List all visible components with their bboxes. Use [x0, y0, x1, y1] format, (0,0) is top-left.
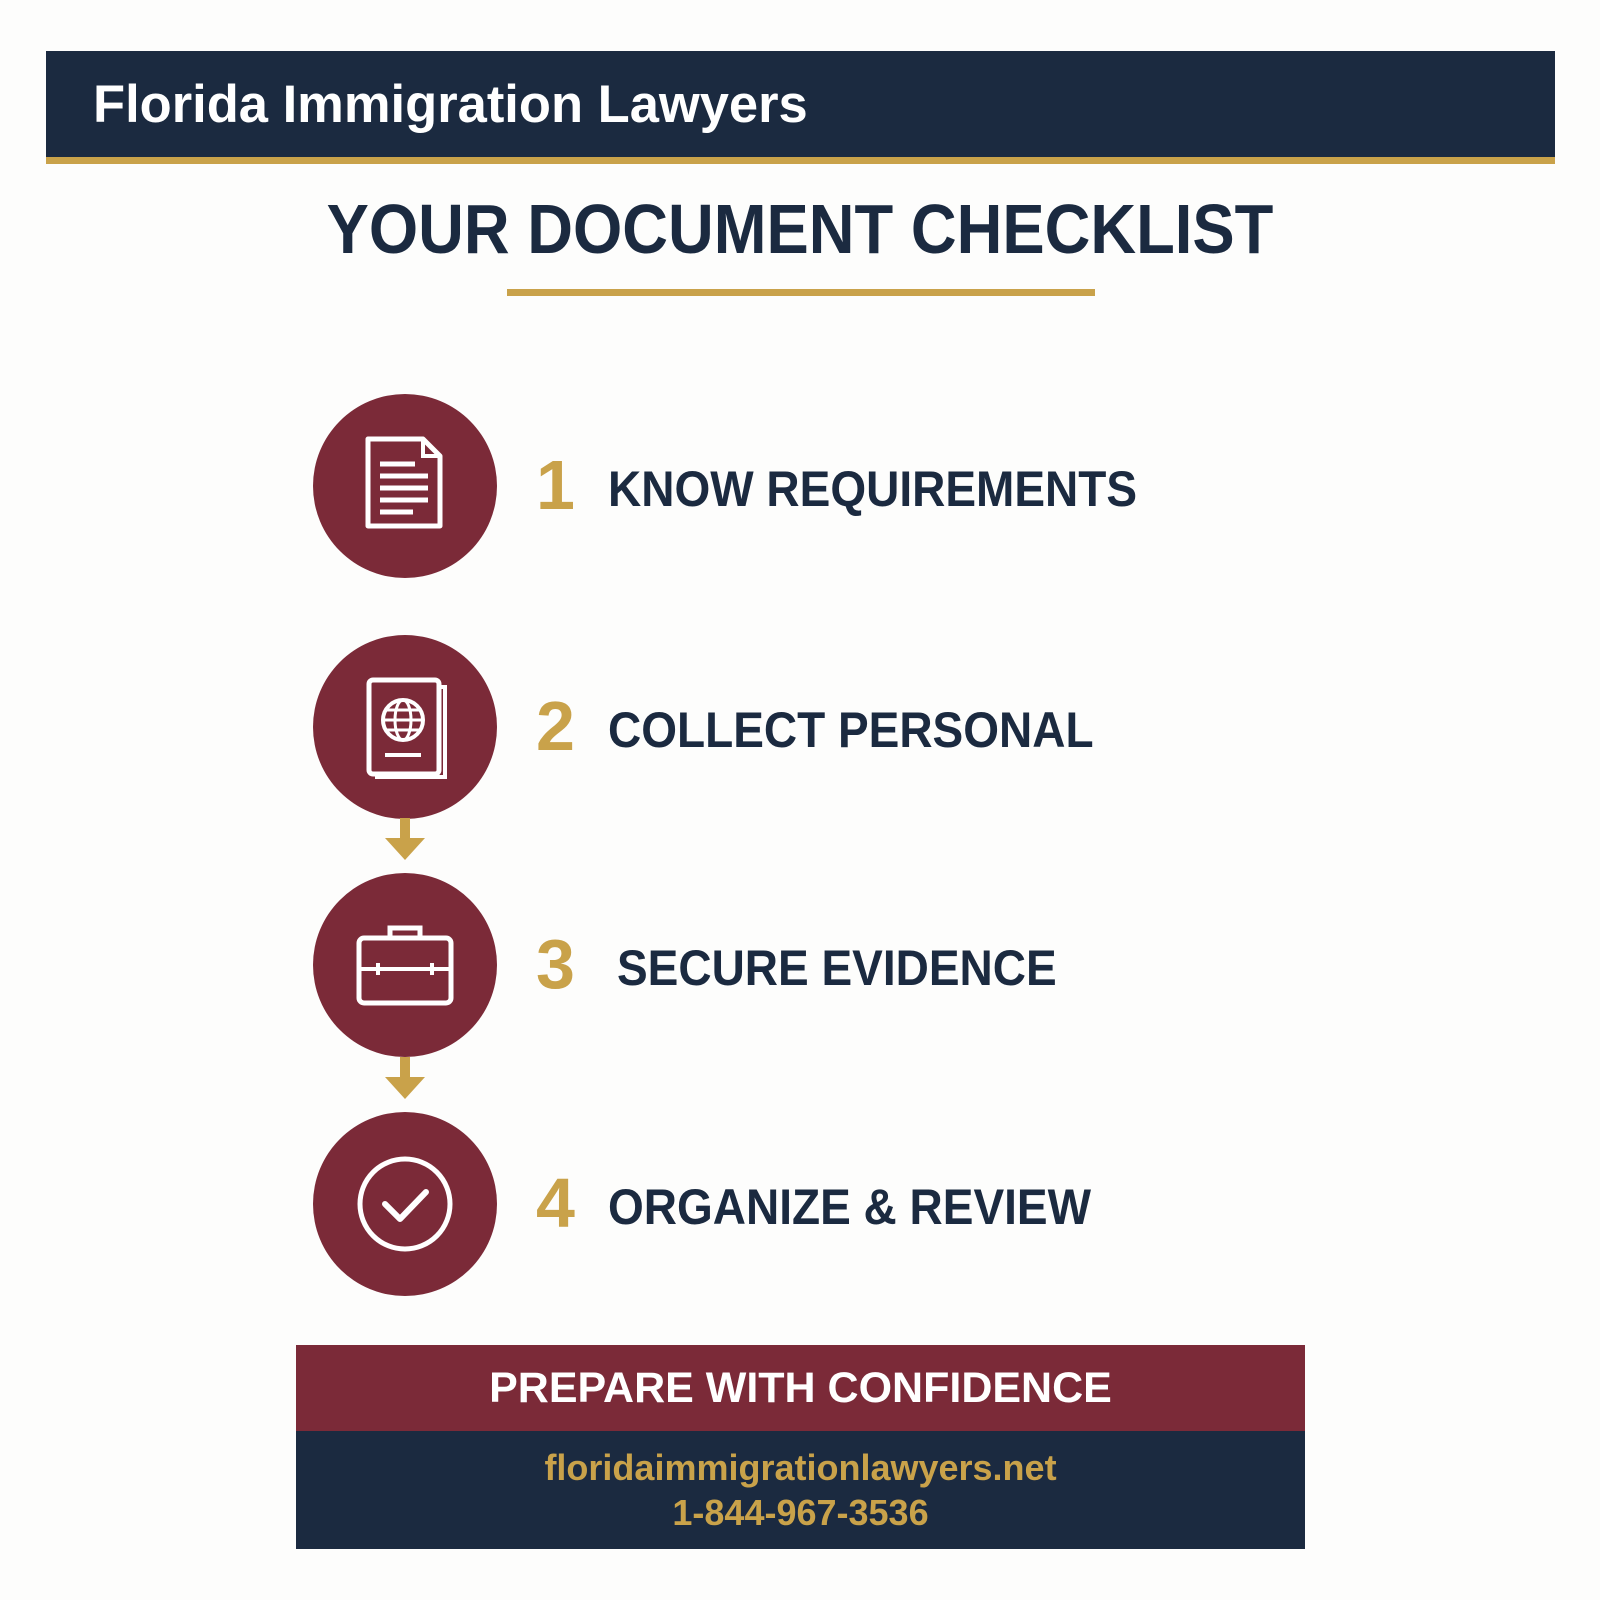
contact info — [544, 1447, 1057, 1533]
header bar — [46, 51, 1555, 164]
footer banner — [296, 1345, 1305, 1431]
header title: Florida Immigration Lawyers — [93, 75, 808, 134]
icon: passport — [313, 635, 497, 819]
label 4: ORGANIZE & REVIEW — [608, 1179, 1091, 1235]
arrow 3 to 4 — [385, 1057, 425, 1099]
step 3 — [313, 873, 1057, 1057]
arrow 2 to 3 — [385, 818, 425, 860]
number 1: 1 — [536, 446, 575, 524]
label 3: SECURE EVIDENCE — [617, 940, 1057, 996]
step 2 — [313, 635, 1094, 819]
title underline — [507, 289, 1095, 296]
label 2: COLLECT PERSONAL — [608, 702, 1094, 758]
icon: document — [313, 394, 497, 578]
contact info: floridaimmigrationlawyers.net — [544, 1447, 1057, 1488]
icon: briefcase — [313, 873, 497, 1057]
step 1 — [313, 394, 1137, 578]
number 4: 4 — [536, 1164, 575, 1242]
icon: check circle — [313, 1112, 497, 1296]
number 2: 2 — [536, 687, 575, 765]
contact info: 1-844-967-3536 — [672, 1492, 929, 1533]
step 4 — [313, 1112, 1091, 1296]
footer banner: PREPARE WITH CONFIDENCE — [489, 1364, 1112, 1412]
footer — [296, 1345, 1305, 1549]
label 1: KNOW REQUIREMENTS — [608, 461, 1137, 517]
main title: YOUR DOCUMENT CHECKLIST — [327, 190, 1273, 268]
number 3: 3 — [536, 925, 575, 1003]
